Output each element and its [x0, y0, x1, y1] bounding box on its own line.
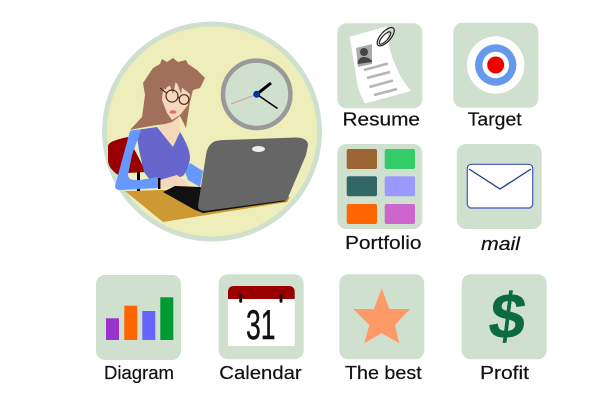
chair: [108, 137, 146, 191]
tile: resume: [337, 23, 422, 108]
label: mail: mail: [481, 233, 521, 254]
tile: the best: [339, 274, 424, 359]
bangs: [156, 66, 195, 94]
illustration: woman at laptop: [104, 24, 320, 239]
bar chart: [106, 297, 173, 340]
glasses: [160, 88, 189, 104]
tile: mail: [457, 144, 542, 229]
tile: target: [453, 23, 538, 108]
laptop lid: [198, 138, 308, 211]
label: diagram: Diagram: [104, 362, 174, 383]
laptop base: [163, 186, 287, 213]
icon: calendar: 31: [246, 301, 276, 348]
lips: [170, 110, 176, 114]
face: [162, 82, 190, 120]
icon: star: [353, 288, 410, 343]
laptop logo: [252, 146, 265, 152]
hand: [160, 175, 190, 192]
label: target: Target: [468, 109, 522, 130]
neck and chest: [158, 114, 181, 147]
label: the best: The best: [345, 362, 422, 383]
label: resume: Resume: [342, 109, 420, 130]
icon: paperclip: [374, 25, 397, 49]
icon: target: [467, 36, 524, 94]
tile: calendar: [219, 274, 304, 359]
background circle: [104, 24, 320, 239]
wall clock: [223, 61, 290, 128]
tile: profit: [462, 274, 547, 359]
torso: [136, 127, 190, 180]
right arm: [185, 163, 203, 187]
icon: envelope: [467, 164, 533, 208]
icon: resume sheet: [350, 26, 411, 104]
hair: [130, 58, 205, 130]
watch cuff: [158, 178, 160, 189]
left sleeve: [115, 130, 158, 190]
icon: dollar sign: $: [485, 280, 530, 352]
label: portfolio: Portfolio: [345, 232, 422, 253]
tile: portfolio: [337, 144, 422, 229]
label: calendar: Calendar: [219, 362, 302, 383]
tile: diagram: [96, 275, 181, 360]
label: profit: Profit: [480, 362, 529, 383]
icon: portfolio swatches: [347, 149, 415, 224]
desk: [125, 190, 290, 222]
